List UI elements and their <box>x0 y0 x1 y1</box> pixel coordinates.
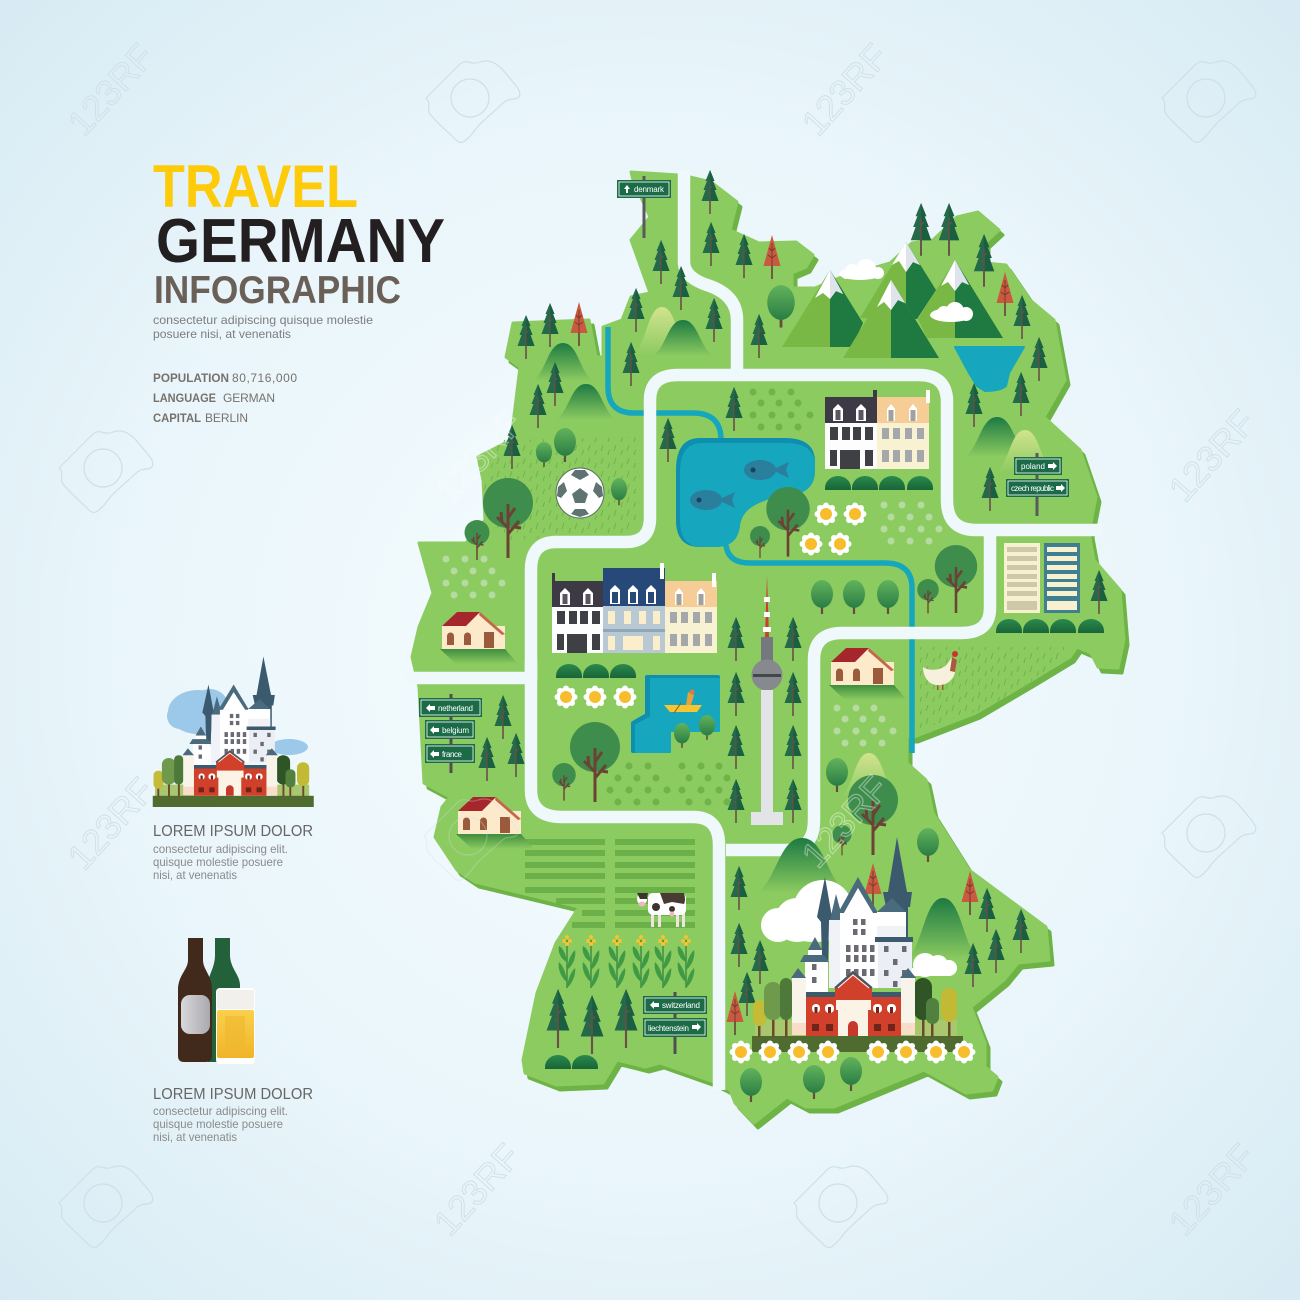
hills <box>533 307 1053 960</box>
skyscrapers <box>1004 543 1080 613</box>
facts: population, language, capital: 80,716,000 <box>232 371 297 385</box>
watermark stamps: 123RF <box>1160 1136 1263 1243</box>
signs: switzerland, liechtenstein <box>643 992 707 1054</box>
body text: nisi, at venenatis <box>153 868 237 882</box>
red trees <box>570 235 1014 1035</box>
facts: population, language, capital: CAPITAL <box>153 411 201 425</box>
icon: bottle label <box>181 995 210 1034</box>
pond with boat <box>633 677 719 752</box>
oval trees <box>536 285 939 1102</box>
buildings: north <box>825 390 930 469</box>
tv tower <box>751 575 783 825</box>
signposts <box>419 176 1069 1054</box>
facts: population, language, capital: LANGUAGE <box>153 391 216 405</box>
buildings: town centre <box>552 563 717 653</box>
signs: netherland, belgium, france: france <box>442 750 463 759</box>
branch trees <box>464 478 977 855</box>
watermark stamps: 123RF <box>793 36 896 143</box>
dark dots <box>606 388 814 806</box>
sign: denmark <box>617 176 671 238</box>
flower row <box>730 1040 976 1064</box>
facts: population, language, capital: BERLIN <box>205 411 248 425</box>
hen <box>923 651 958 690</box>
watermark over map: 123RF <box>793 768 896 875</box>
light dots <box>442 502 942 746</box>
pine trees <box>478 170 1108 1054</box>
title: germany: GERMANY <box>156 207 445 276</box>
mountains <box>782 242 1003 358</box>
football <box>556 468 604 518</box>
body text: consectetur adipiscing elit. <box>153 842 288 856</box>
watermark stamps: 123RF <box>1160 402 1263 509</box>
corn <box>559 935 694 988</box>
signs: netherland, belgium, france <box>419 694 482 773</box>
watermark stamps: 123RF <box>59 770 162 877</box>
facts: population, language, capital <box>153 371 297 425</box>
watermark stamps: 123RF <box>59 36 162 143</box>
mountain: right <box>918 260 1003 338</box>
body text: nisi, at venenatis <box>153 1130 237 1144</box>
watermark stamps: 123RF <box>425 1136 528 1243</box>
icon: blue clouds <box>167 689 308 755</box>
houses <box>440 612 907 849</box>
watermark over map <box>424 403 896 880</box>
subtitle: consectetur adipiscing quisque molestie <box>153 313 373 327</box>
body text: consectetur adipiscing elit. <box>153 1104 288 1118</box>
signs: netherland, belgium, france: belgium <box>442 726 469 735</box>
facts: population, language, capital: GERMAN <box>223 391 275 405</box>
germany map <box>405 170 1128 1128</box>
signs: switzerland, liechtenstein: switzerland <box>662 1001 700 1010</box>
body text: quisque molestie posuere <box>153 855 283 869</box>
icon: fish <box>744 460 789 480</box>
pond north-east <box>955 347 1024 391</box>
egg flowers <box>554 502 866 708</box>
subtitle: posuere nisi, at venenatis <box>153 327 291 341</box>
castle <box>752 837 963 1052</box>
clouds <box>839 259 973 322</box>
heading: LOREM IPSUM DOLOR <box>153 1086 313 1103</box>
crop strips <box>525 839 695 928</box>
title: infographic: INFOGRAPHIC <box>154 269 401 312</box>
mountain: back <box>860 242 936 319</box>
side feature: beer <box>153 938 313 1144</box>
bushes <box>545 476 1104 1069</box>
roads <box>405 170 1102 1090</box>
signs: poland and czech republic <box>1006 453 1069 516</box>
side feature: castle <box>153 656 314 882</box>
cow <box>637 893 686 927</box>
signs: poland and czech republic: czech republic <box>1011 484 1054 493</box>
icon: rowing boat <box>664 690 702 713</box>
lake with fish <box>676 438 815 547</box>
castle clouds <box>761 880 957 977</box>
hatched fields <box>480 437 1075 730</box>
heading: LOREM IPSUM DOLOR <box>153 823 313 840</box>
icon: beer glass <box>216 988 255 1064</box>
signs: poland and czech republic: poland <box>1021 462 1045 471</box>
signs: netherland, belgium, france: netherland <box>438 704 473 713</box>
facts: population, language, capital: POPULATION <box>153 371 229 385</box>
signs: switzerland, liechtenstein: liechtenstein <box>648 1024 689 1033</box>
title block <box>153 153 445 425</box>
map land <box>412 172 1124 1123</box>
title: travel: TRAVEL <box>153 153 358 220</box>
body text: quisque molestie posuere <box>153 1117 283 1131</box>
sign: denmark: denmark <box>634 185 665 194</box>
mountain: left <box>782 270 863 347</box>
icon: green bottle <box>208 938 240 1062</box>
icon: small castle <box>153 656 314 807</box>
mountain: front <box>843 280 939 358</box>
watermark over map: 123RF <box>427 403 530 510</box>
icon: brown bottle <box>178 938 212 1062</box>
map extrusion edge <box>416 177 1128 1128</box>
rivers <box>608 327 912 753</box>
